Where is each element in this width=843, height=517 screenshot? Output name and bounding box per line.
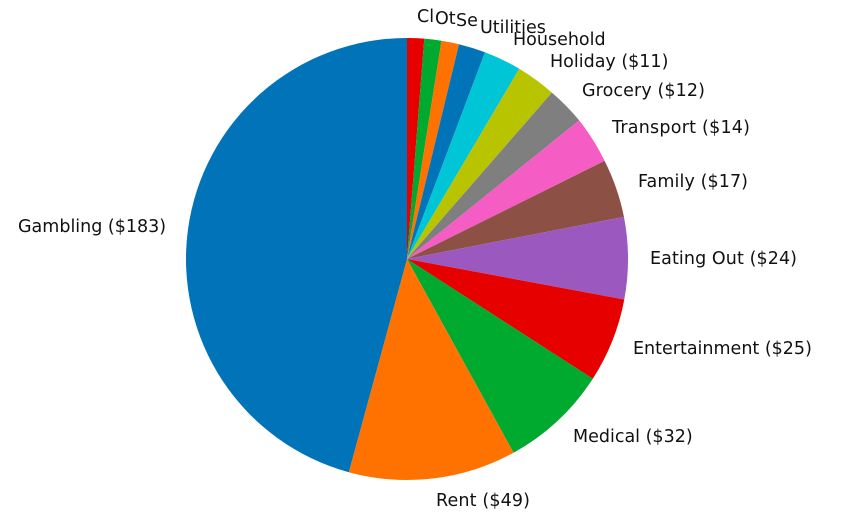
label: Holiday: Holiday ($11) <box>550 52 668 72</box>
slice: Holiday <box>407 69 552 259</box>
slice: Entertainment <box>407 259 624 379</box>
slice: Gambling <box>186 38 407 472</box>
label: Eating Out: Eating Out ($24) <box>650 249 797 269</box>
label: Cl: Cl <box>417 7 434 27</box>
label: Rent: Rent ($49) <box>436 491 530 511</box>
label: Se: Se <box>456 11 478 31</box>
slice: Medical <box>407 259 593 453</box>
slice: Utilities <box>407 44 485 259</box>
label: Household: Household <box>513 30 606 50</box>
slice: Rent <box>349 259 514 480</box>
slice: Ot <box>407 39 441 259</box>
label: Transport: Transport ($14) <box>611 118 750 138</box>
label: Entertainment: Entertainment ($25) <box>633 339 812 359</box>
label: Gambling: Gambling ($183) <box>18 217 166 237</box>
slice: Se <box>407 41 459 259</box>
slice: Transport <box>407 120 605 259</box>
slice: Cl <box>407 38 424 259</box>
slice: Grocery <box>407 93 579 259</box>
slice: Household <box>407 52 519 259</box>
slice: Family <box>407 161 624 259</box>
slice: Eating Out <box>407 217 628 299</box>
label: Grocery: Grocery ($12) <box>582 81 705 101</box>
label: Utilities: Utilities <box>480 18 546 38</box>
label: Family: Family ($17) <box>638 172 748 192</box>
label: Medical: Medical ($32) <box>573 427 693 447</box>
label: Ot: Ot <box>435 9 456 29</box>
